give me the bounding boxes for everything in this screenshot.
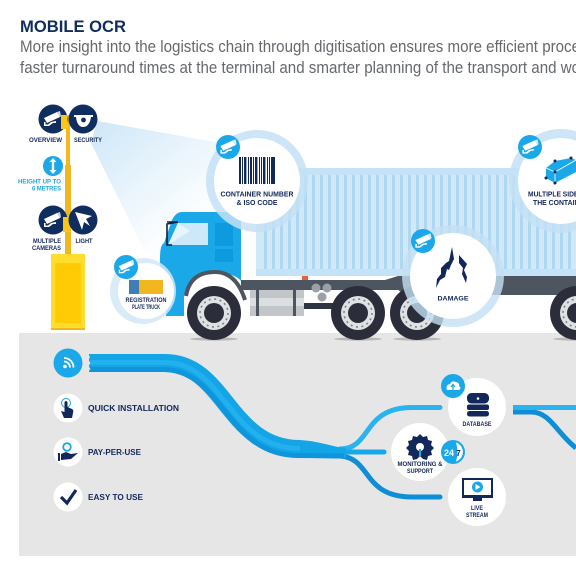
live stream node: STREAM [466,512,488,519]
multiple cameras icon [32,206,68,252]
wifi icon [54,348,82,378]
height icon: 6 METRES [32,186,62,192]
damage callout: DAMAGE [438,296,469,302]
intro text [20,38,576,77]
monitoring node [391,423,449,481]
container [256,168,576,280]
monitoring node: SUPPORT [407,468,433,475]
multiple sides callout [509,129,576,233]
multiple cameras icon: MULTIPLE [33,238,62,245]
camera mast [51,115,85,330]
registration plate callout [110,255,176,324]
grey panel [19,333,576,556]
quick installation item: QUICK INSTALLATION [88,404,179,413]
damage callout [402,225,504,327]
database node [441,374,506,436]
security icon: SECURITY [74,137,103,144]
security icon [68,104,103,144]
easy to use item: EASY TO USE [88,493,144,502]
container number callout: & ISO CODE [236,200,278,207]
light beam [91,121,270,300]
light icon [68,206,98,245]
live stream node [448,468,506,526]
live stream node: LIVE [471,505,484,512]
light icon: LIGHT [76,238,93,245]
database node: DATABASE [462,421,492,428]
truck chassis [241,276,576,316]
monitoring node: MONITORING & [398,461,443,468]
wheels [187,286,576,341]
multiple cameras icon: CAMERAS [32,245,62,252]
registration plate callout: PLATE TRUCK [132,304,160,311]
data flow lines [88,354,576,497]
overview icon: OVERVIEW [29,137,63,144]
easy to use item [54,482,144,512]
quick installation item [54,394,179,422]
pay-per-use item [54,438,142,466]
container number callout: CONTAINER NUMBER [220,192,294,198]
container number callout [206,130,308,232]
24/7 badge: 7 [456,449,461,458]
24/7 badge [441,440,465,464]
pay-per-use item: PAY-PER-USE [88,448,142,457]
title: MOBILE OCR [20,17,126,36]
overview icon [29,104,68,144]
height icon [18,156,63,192]
24/7 badge: 24 [444,448,454,458]
truck cab [160,212,245,316]
registration plate callout: REGISTRATION [126,297,167,304]
height icon: HEIGHT UP TO [18,178,61,186]
